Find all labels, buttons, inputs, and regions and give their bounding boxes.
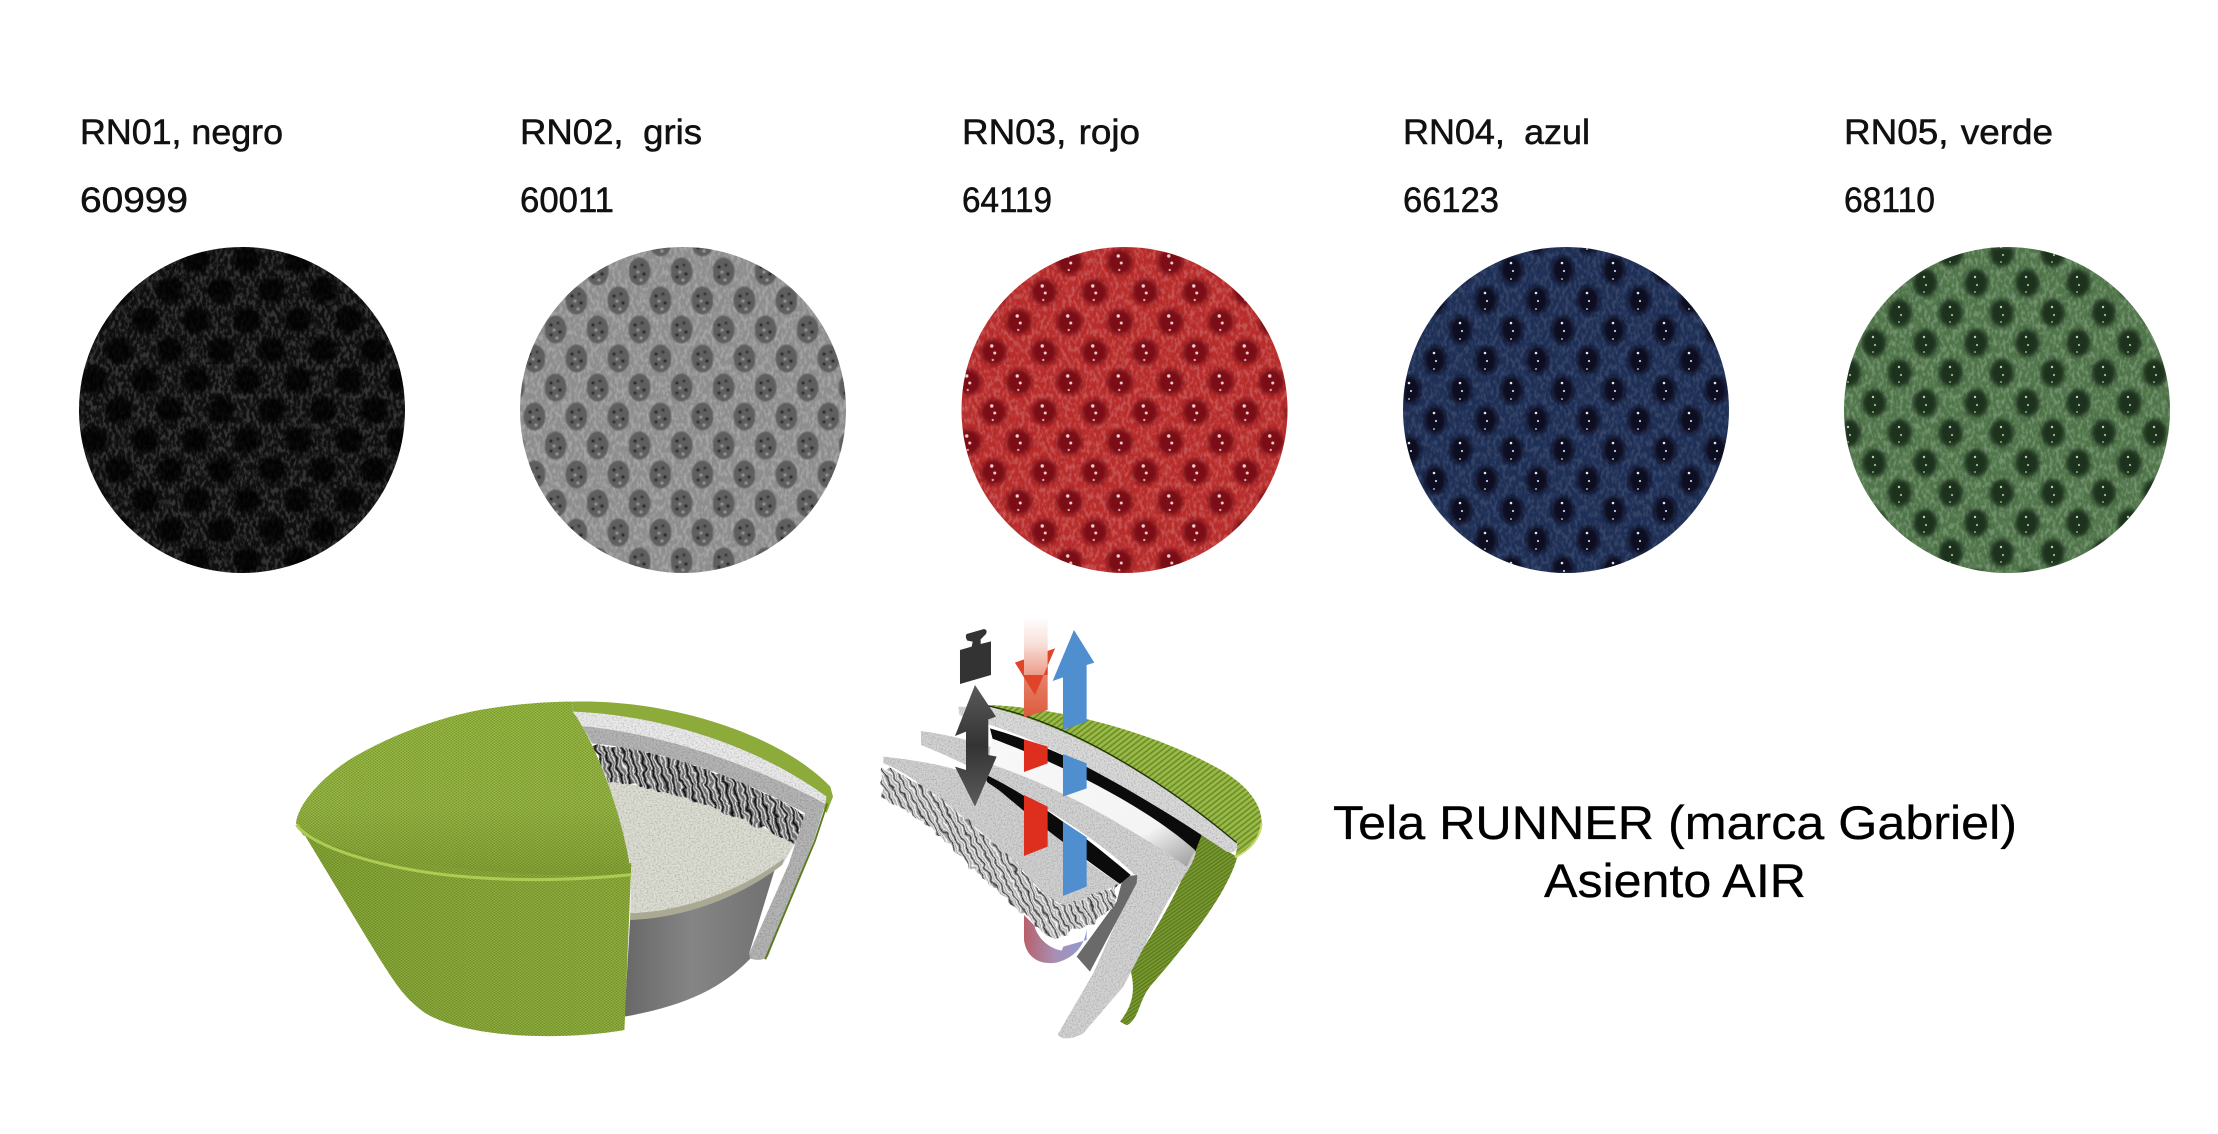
- section: black gap: [990, 728, 1202, 857]
- section: black under-layer: [987, 775, 1131, 884]
- swatch RN04 azul: [1403, 113, 1729, 573]
- code: 60999: 60999: [80, 181, 188, 220]
- stool: sand foam seat: [607, 782, 795, 919]
- arrow: blue upward air arrow: [1053, 630, 1094, 730]
- label: RN05, verde: RN05, verde: [1844, 113, 2053, 152]
- stool: bristle layer: [592, 743, 805, 845]
- section: lower green cover: [1120, 833, 1237, 1025]
- section: U-bend airflow: [1024, 915, 1087, 963]
- code: 66123: 66123: [1403, 181, 1499, 220]
- label: RN02, gris: RN02, gris: [520, 113, 702, 152]
- illustration: green AIR stool with cut-away: [296, 701, 833, 1036]
- illustration: layered cross-section with arrows: [882, 617, 1262, 1038]
- label: RN01, negro: RN01, negro: [80, 113, 283, 152]
- fabric circle: black: [79, 247, 405, 573]
- stool: back strip of green cover: [573, 701, 833, 813]
- stool: green edge: [765, 803, 827, 959]
- swatch RN03 rojo: [961, 113, 1288, 573]
- arrow: red downward heat arrow: [1015, 617, 1055, 717]
- section: middle layer white band: [988, 738, 1195, 867]
- caption line 1: Tela RUNNER (marca Gabriel): [1333, 797, 2017, 850]
- stool: grey foam L-shaped layer: [582, 726, 825, 960]
- code: 68110: 68110: [1844, 181, 1935, 220]
- section: dark support plate: [1077, 875, 1137, 972]
- stool: top cushion: [296, 702, 631, 875]
- fabric circle: green: [1844, 247, 2170, 573]
- swatch RN05 verde: [1844, 113, 2170, 573]
- fabric circle: grey: [520, 247, 846, 573]
- section: bristle layer: [882, 767, 1118, 938]
- arrow: grey double pressure arrow: [955, 685, 997, 807]
- caption line 2: Asiento AIR: [1544, 855, 1806, 908]
- stool: lower green skirt: [298, 823, 631, 1036]
- swatch RN01 negro: [79, 113, 405, 573]
- caption: [1333, 797, 2017, 908]
- fabric circle: blue: [1403, 247, 1729, 573]
- section: top green cover: [988, 705, 1262, 857]
- section: upper foam strip: [958, 707, 1237, 852]
- fabric circle: red: [961, 247, 1288, 573]
- stool: grey base: [624, 867, 776, 1017]
- section: lower foam top: [883, 757, 1120, 905]
- code: 64119: 64119: [962, 181, 1052, 220]
- label: RN04, azul: RN04, azul: [1403, 113, 1590, 152]
- section: middle L-shaped foam layer: [921, 731, 1196, 1038]
- stool: white top foam layer: [573, 712, 826, 804]
- stool: piping: [297, 825, 631, 880]
- code: 60011: 60011: [520, 181, 614, 220]
- label: RN03, rojo: RN03, rojo: [962, 113, 1140, 152]
- red arrow, lower segments: [1024, 739, 1048, 856]
- blue arrow, lower segments: [1063, 754, 1087, 896]
- icon: weight: [960, 629, 991, 684]
- swatch RN02 gris: [520, 113, 846, 573]
